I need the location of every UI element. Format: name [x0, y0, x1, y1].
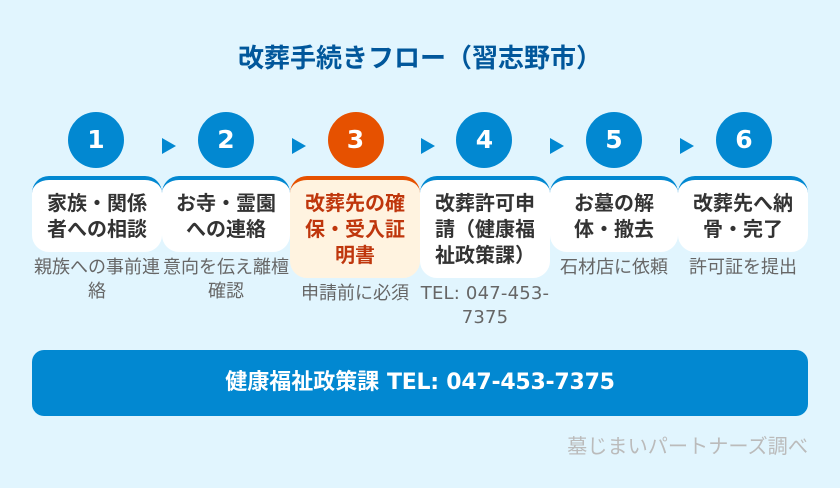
step 4 number: 4 — [476, 125, 493, 154]
step 1 number: 1 — [87, 125, 105, 154]
step 1 number — [68, 112, 124, 168]
step 2 number — [198, 112, 254, 168]
card: step 3 highlighted — [290, 176, 420, 278]
note: step 6: 許可証を提出 — [689, 257, 797, 278]
card: step 3 highlighted: 改葬先の確保・受入証明書 — [305, 191, 405, 267]
card: step 2 — [162, 176, 290, 252]
step 5 number — [586, 112, 642, 168]
card: step 5: お墓の解体・撤去 — [574, 191, 654, 241]
contact bar: 健康福祉政策課 TEL: 047-453-7375 — [225, 370, 615, 395]
step 3 number — [328, 112, 384, 168]
card: step 6: 改葬先へ納骨・完了 — [693, 191, 793, 241]
step 2 number: 2 — [217, 125, 235, 154]
arrow 2 to 3 — [292, 138, 306, 154]
card: step 2: お寺・霊園への連絡 — [176, 191, 276, 241]
card: step 1 — [32, 176, 162, 252]
card: step 4 — [420, 176, 550, 278]
contact bar — [32, 350, 808, 416]
note: step 1: 親族への事前連絡 — [34, 257, 160, 302]
step 3 number: 3 — [347, 125, 364, 154]
card: step 6 — [678, 176, 808, 252]
source credit: 墓じまいパートナーズ調べ — [567, 434, 808, 458]
title: 改葬手続きフロー（習志野市） — [238, 44, 602, 74]
arrow 5 to 6 — [680, 138, 694, 154]
arrow 4 to 5 — [550, 138, 564, 154]
note: step 3: 申請前に必須 — [301, 283, 409, 304]
step 5 number: 5 — [605, 125, 623, 154]
card: step 4: 改葬許可申請（健康福祉政策課） — [435, 191, 535, 267]
arrow 3 to 4 — [421, 138, 435, 154]
arrow 1 to 2 — [162, 138, 176, 154]
note: step 4: TEL: 047-453-7375 — [421, 283, 549, 328]
card: step 5 — [550, 176, 678, 252]
note: step 5: 石材店に依頼 — [560, 257, 668, 278]
step 6 number — [716, 112, 772, 168]
card: step 1: 家族・関係者への相談 — [47, 191, 147, 241]
note: step 2: 意向を伝え離檀確認 — [163, 257, 289, 302]
step 4 number — [456, 112, 512, 168]
step 6 number: 6 — [735, 125, 753, 154]
